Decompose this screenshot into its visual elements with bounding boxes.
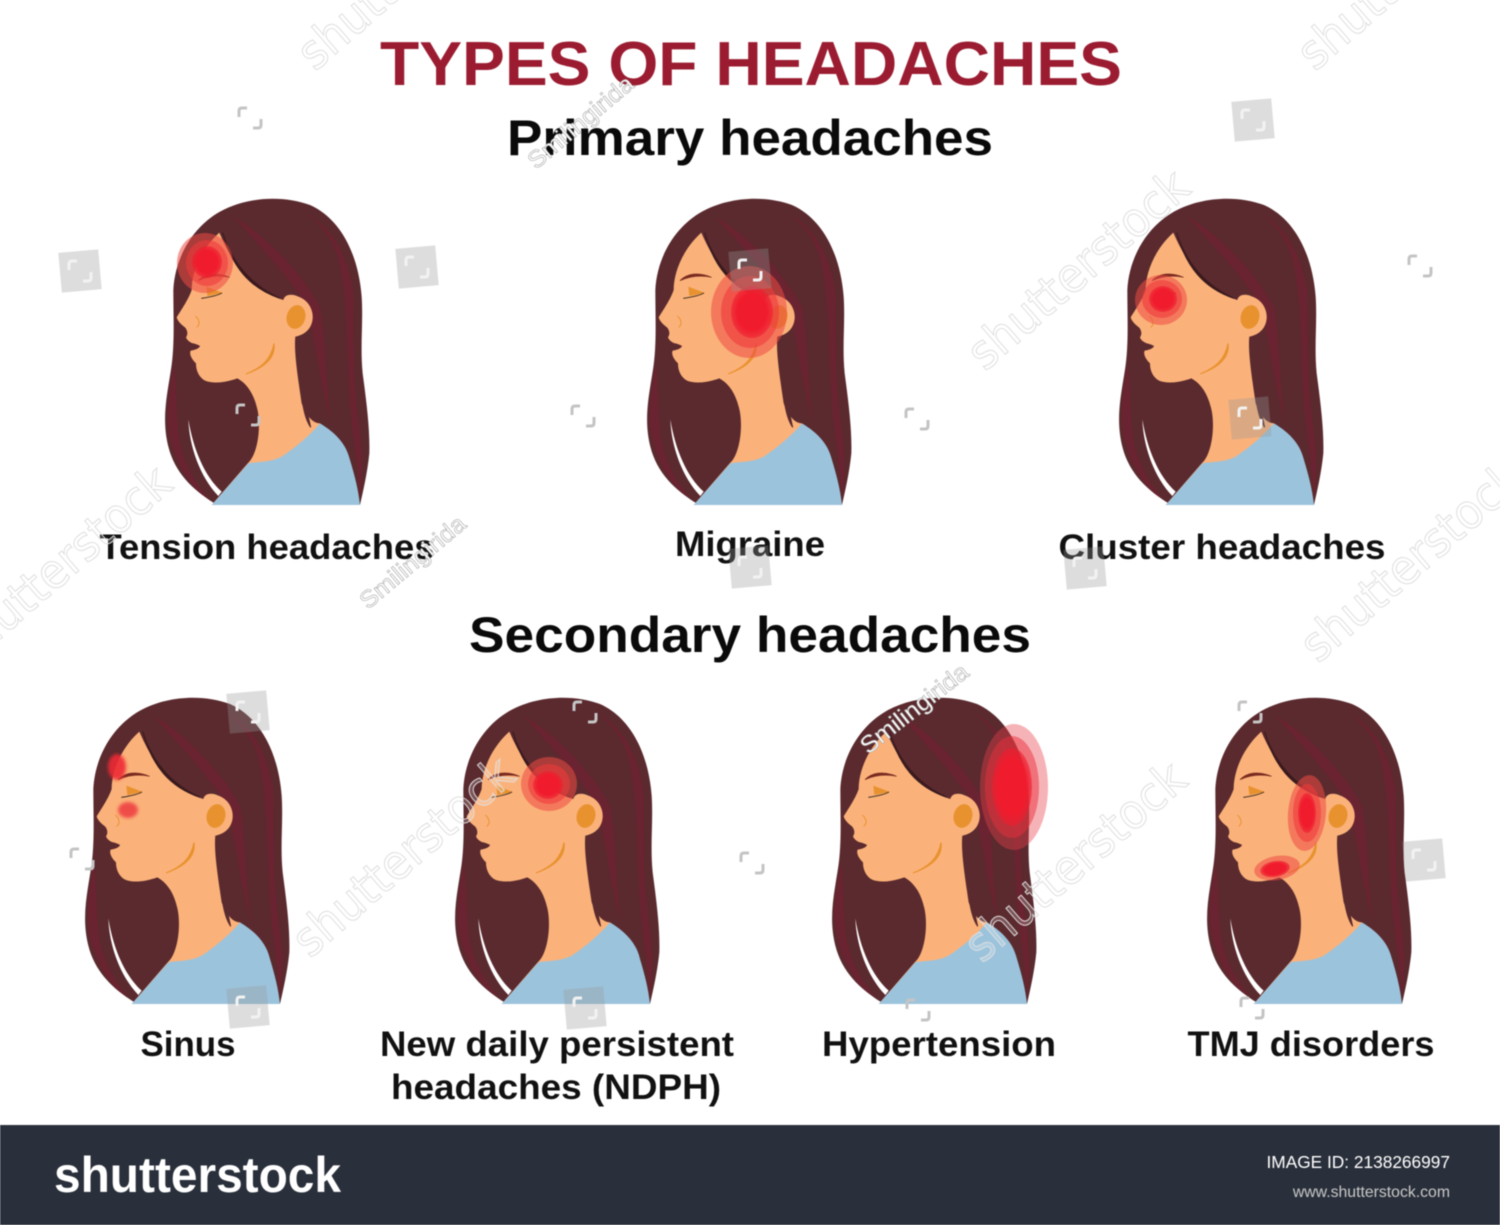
panel: TMJ disorders xyxy=(1188,698,1434,1064)
panel: cluster headaches xyxy=(1058,199,1386,567)
label: migraine: Migraine xyxy=(675,525,825,564)
shutterstock logo: shutterstock xyxy=(54,1147,341,1203)
watermarks: shutterstock xyxy=(956,158,1201,381)
heading: secondary headaches: Secondary headaches xyxy=(469,607,1031,663)
watermarks: Smilingirida xyxy=(523,70,640,175)
label: cluster headaches: Cluster headaches xyxy=(1058,528,1386,567)
label: new daily persistent headaches xyxy=(380,1025,734,1107)
label: new daily persistent headaches: New daily persistent xyxy=(380,1025,734,1064)
image id: IMAGE ID: 2138266997 xyxy=(1266,1152,1450,1172)
heading: primary headaches: Primary headaches xyxy=(507,110,993,166)
label: TMJ disorders: TMJ disorders xyxy=(1188,1025,1434,1064)
panel: hypertension xyxy=(822,698,1056,1064)
label: sinus: Sinus xyxy=(140,1025,236,1064)
title: TYPES OF HEADACHES xyxy=(380,30,1122,99)
watermarks: Smilingirida xyxy=(855,658,975,760)
panel: tension headaches xyxy=(100,199,434,567)
watermarks: shutterstock xyxy=(281,745,526,968)
label: hypertension: Hypertension xyxy=(822,1025,1056,1064)
website: www.shutterstock.com xyxy=(1292,1184,1450,1201)
label: new daily persistent headaches: headaches (NDPH) xyxy=(391,1068,721,1107)
watermarks: shutterstock xyxy=(953,750,1198,973)
watermarks: Smilingirida xyxy=(355,510,472,615)
panel: sinus xyxy=(85,698,289,1064)
panel: migraine xyxy=(647,199,851,564)
panel: new daily persistent headaches xyxy=(380,698,734,1107)
footer bar xyxy=(0,1125,1500,1225)
label: tension headaches: Tension headaches xyxy=(100,528,434,567)
